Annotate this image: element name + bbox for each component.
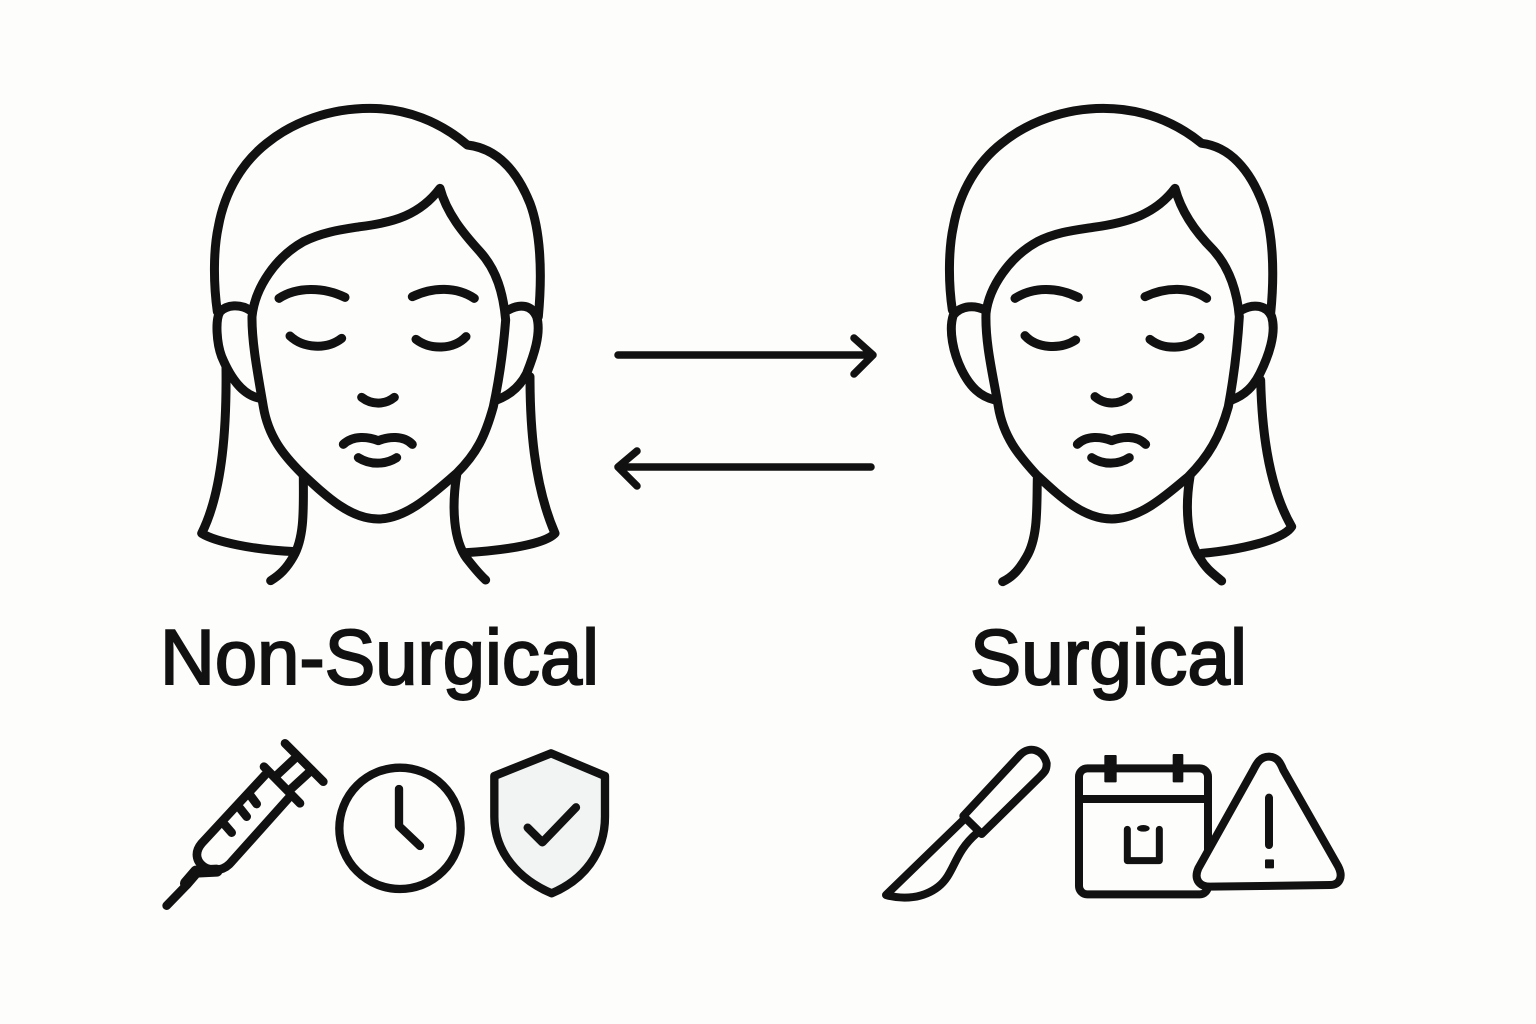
icon: syringe [167, 743, 323, 906]
icon: calendar [1079, 754, 1208, 894]
panel: non-surgical face [202, 108, 555, 581]
icon: shield with check [494, 753, 605, 893]
icon: warning triangle [1197, 757, 1341, 887]
panel: surgical face [949, 108, 1292, 582]
arrow: surgical to non-surgical [618, 451, 871, 486]
heading: non-surgical: Non-Surgical [160, 613, 599, 701]
icon: scalpel [886, 750, 1047, 898]
arrow: non-surgical to surgical [618, 338, 873, 374]
icon: clock [339, 768, 461, 889]
heading: surgical: Surgical [970, 613, 1247, 701]
